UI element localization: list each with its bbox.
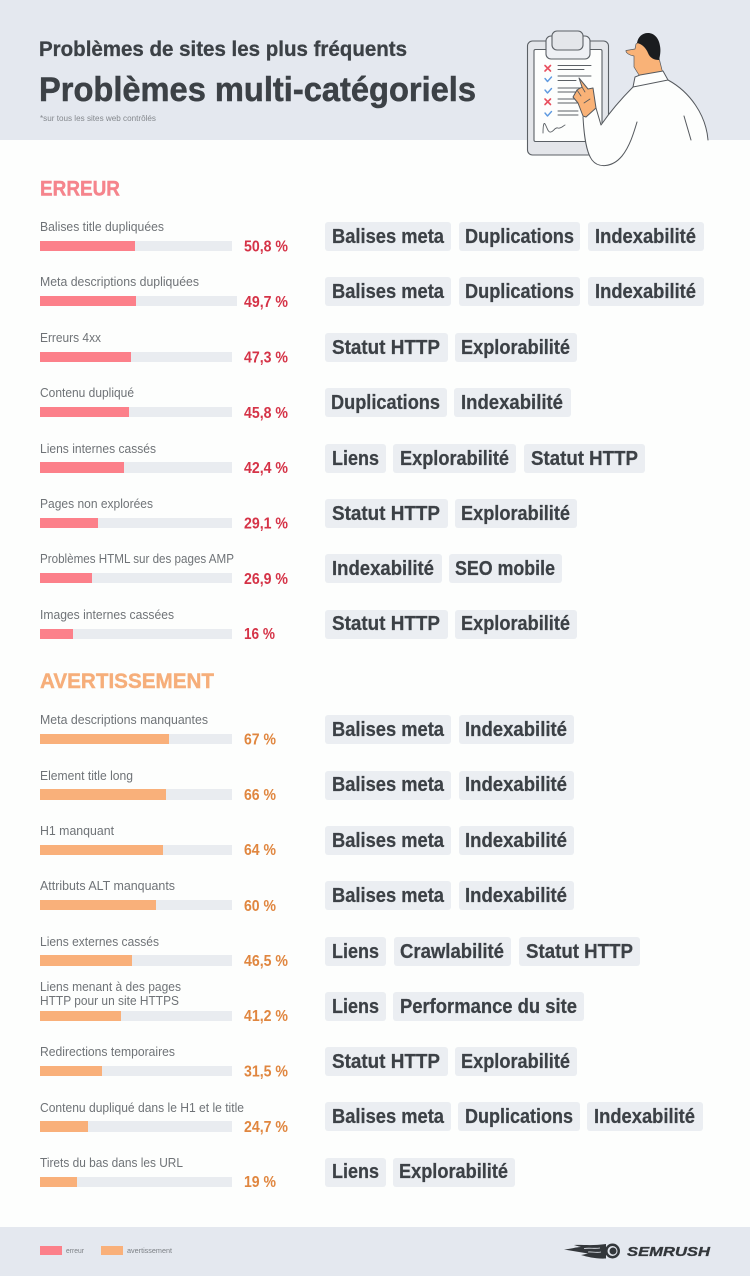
row: Contenu dupliqué: 45,8 % [244, 405, 288, 422]
row: Balises title dupliquées: 50,8 % [244, 238, 288, 256]
row: Attributs ALT manquants: 60 % [244, 898, 276, 915]
row: Liens externes cassés [40, 935, 640, 970]
row: Images internes cassées: 16 % [244, 626, 275, 643]
row: Problèmes HTML sur des pages AMP: Indexabilité [332, 558, 434, 580]
row: Images internes cassées: Explorabilité [461, 613, 570, 635]
hand [573, 78, 596, 117]
row: Meta descriptions manquantes: Indexabilité [465, 719, 567, 741]
row: Liens externes cassés: 46,5 % [244, 953, 288, 970]
row: Meta descriptions dupliquées: 49,7 % [244, 294, 288, 311]
row: Liens externes cassés: Crawlabilité [400, 941, 504, 963]
row: Redirections temporaires: Redirections temporaires [40, 1045, 175, 1059]
row: Tirets du bas dans les URL: Explorabilité [399, 1161, 508, 1183]
row: Liens menant à des pages HTTP pour un site HTTPS: Liens menant à des pages [40, 980, 181, 994]
row: Pages non explorées: Explorabilité [461, 503, 570, 525]
row: Pages non explorées: Pages non explorées [40, 497, 153, 511]
header band [0, 0, 750, 140]
row: Erreurs 4xx: 47,3 % [244, 350, 288, 366]
row: Contenu dupliqué [40, 386, 571, 422]
row: Liens externes cassés: Statut HTTP [526, 941, 633, 963]
row: Contenu dupliqué dans le H1 et le title: Contenu dupliqué dans le H1 et le title [40, 1101, 244, 1115]
row: Contenu dupliqué: Duplications [331, 392, 440, 414]
row: Erreurs 4xx: Erreurs 4xx [40, 331, 102, 345]
row: Liens menant à des pages HTTP pour un site HTTPS: HTTP pour un site HTTPS [40, 994, 179, 1008]
row: Meta descriptions dupliquées: Indexabilité [595, 281, 696, 303]
row: Liens internes cassés: Explorabilité [400, 448, 509, 470]
row: Images internes cassées [40, 608, 577, 643]
row: Meta descriptions manquantes: Meta descriptions manquantes [40, 713, 208, 727]
footnote: *sur tous les sites web contrôlés [40, 113, 156, 123]
row: Erreurs 4xx: Explorabilité [461, 337, 570, 359]
row: Liens externes cassés: Liens [332, 941, 379, 963]
row: H1 manquant: Balises meta [332, 830, 445, 852]
row: Liens menant à des pages HTTP pour un site HTTPS [40, 980, 584, 1025]
row: Contenu dupliqué: Contenu dupliqué [40, 386, 134, 400]
row: Element title long: 66 % [244, 787, 276, 804]
row: Contenu dupliqué dans le H1 et le title: Duplications [465, 1106, 573, 1128]
row: Redirections temporaires: 31,5 % [244, 1064, 288, 1080]
neck and face [626, 38, 664, 79]
row: Attributs ALT manquants: Balises meta [332, 885, 445, 907]
row: H1 manquant: 64 % [244, 842, 276, 859]
row: Contenu dupliqué dans le H1 et le title: Balises meta [332, 1106, 445, 1128]
title: supertitle: Problèmes de sites les plus fréquents [39, 37, 407, 61]
title: main heading: Problèmes multi-catégoriels [39, 71, 476, 109]
row: Tirets du bas dans les URL: Liens [332, 1161, 379, 1183]
row: Tirets du bas dans les URL: 19 % [244, 1174, 276, 1191]
row: H1 manquant [40, 824, 574, 859]
row: Liens internes cassés: Statut HTTP [531, 448, 638, 470]
row: Element title long: Indexabilité [465, 774, 567, 796]
row: Balises title dupliquées [40, 220, 704, 256]
row: Liens menant à des pages HTTP pour un site HTTPS: Performance du site [400, 996, 577, 1018]
footer band [0, 1227, 750, 1276]
row: Images internes cassées: Statut HTTP [332, 613, 440, 635]
row: Redirections temporaires [40, 1045, 577, 1080]
row: H1 manquant: Indexabilité [465, 830, 567, 852]
row: Attributs ALT manquants: Attributs ALT manquants [40, 879, 175, 893]
row: Contenu dupliqué dans le H1 et le title: Indexabilité [594, 1106, 695, 1128]
row: Problèmes HTML sur des pages AMP: Problèmes HTML sur des pages AMP [40, 552, 234, 566]
row: Element title long: Balises meta [332, 774, 445, 796]
row: Balises title dupliquées: Indexabilité [595, 226, 696, 248]
legend [40, 1246, 173, 1255]
row: Element title long: Element title long [40, 769, 133, 783]
row: Liens menant à des pages HTTP pour un site HTTPS: Liens [332, 996, 379, 1018]
row: Meta descriptions dupliquées [40, 275, 704, 311]
row: Meta descriptions manquantes: 67 % [244, 732, 276, 748]
row: Element title long [40, 769, 574, 804]
row: Balises title dupliquées: Balises title dupliquées [40, 220, 164, 234]
row: Balises title dupliquées: Duplications [465, 226, 574, 248]
clipboard [528, 31, 608, 155]
row: Erreurs 4xx: Statut HTTP [332, 337, 440, 359]
row: Meta descriptions dupliquées: Meta descriptions dupliquées [40, 275, 199, 289]
row: Contenu dupliqué dans le H1 et le title: 24,7 % [244, 1119, 288, 1136]
heading: AVERTISSEMENT: AVERTISSEMENT [40, 670, 214, 693]
row: Pages non explorées: Statut HTTP [332, 503, 440, 525]
row: Liens internes cassés [40, 442, 645, 477]
legend: erreur [66, 1246, 84, 1255]
row: Tirets du bas dans les URL: Tirets du bas dans les URL [40, 1156, 183, 1170]
row: Attributs ALT manquants: Indexabilité [465, 885, 567, 907]
row: Liens internes cassés: Liens internes cassés [40, 442, 156, 456]
row: Meta descriptions dupliquées: Balises meta [332, 281, 445, 303]
heading: ERREUR: ERREUR [40, 178, 120, 200]
row: Liens externes cassés: Liens externes cassés [40, 935, 159, 949]
row: Liens internes cassés: Liens [332, 448, 379, 470]
logo: Semrush: SEMRUSH [627, 1244, 711, 1259]
row: Tirets du bas dans les URL [40, 1156, 515, 1191]
hair [637, 33, 660, 60]
row: Problèmes HTML sur des pages AMP [40, 552, 562, 588]
row: Erreurs 4xx [40, 331, 577, 366]
row: Redirections temporaires: Explorabilité [461, 1051, 570, 1073]
row: Balises title dupliquées: Balises meta [332, 226, 445, 248]
row: Meta descriptions dupliquées: Duplications [465, 281, 574, 303]
row: Redirections temporaires: Statut HTTP [332, 1051, 440, 1073]
man body [583, 80, 708, 166]
legend: avertissement [127, 1246, 173, 1255]
collar [633, 71, 668, 87]
row: H1 manquant: H1 manquant [40, 824, 115, 838]
row: Contenu dupliqué dans le H1 et le title [40, 1101, 703, 1136]
row: Contenu dupliqué: Indexabilité [461, 392, 563, 414]
row: Pages non explorées [40, 497, 577, 532]
row: Meta descriptions manquantes: Balises meta [332, 719, 445, 741]
row: Problèmes HTML sur des pages AMP: SEO mobile [455, 558, 555, 580]
row: Liens menant à des pages HTTP pour un site HTTPS: 41,2 % [244, 1008, 288, 1025]
row: Attributs ALT manquants [40, 879, 574, 915]
row: Problèmes HTML sur des pages AMP: 26,9 % [244, 571, 288, 588]
logo: Semrush [564, 1244, 711, 1259]
row: Images internes cassées: Images internes cassées [40, 608, 174, 622]
row: Pages non explorées: 29,1 % [244, 516, 288, 532]
row: Meta descriptions manquantes [40, 713, 574, 748]
row: Liens internes cassés: 42,4 % [244, 460, 288, 477]
icon: man pointing at clipboard checklist [528, 31, 708, 166]
